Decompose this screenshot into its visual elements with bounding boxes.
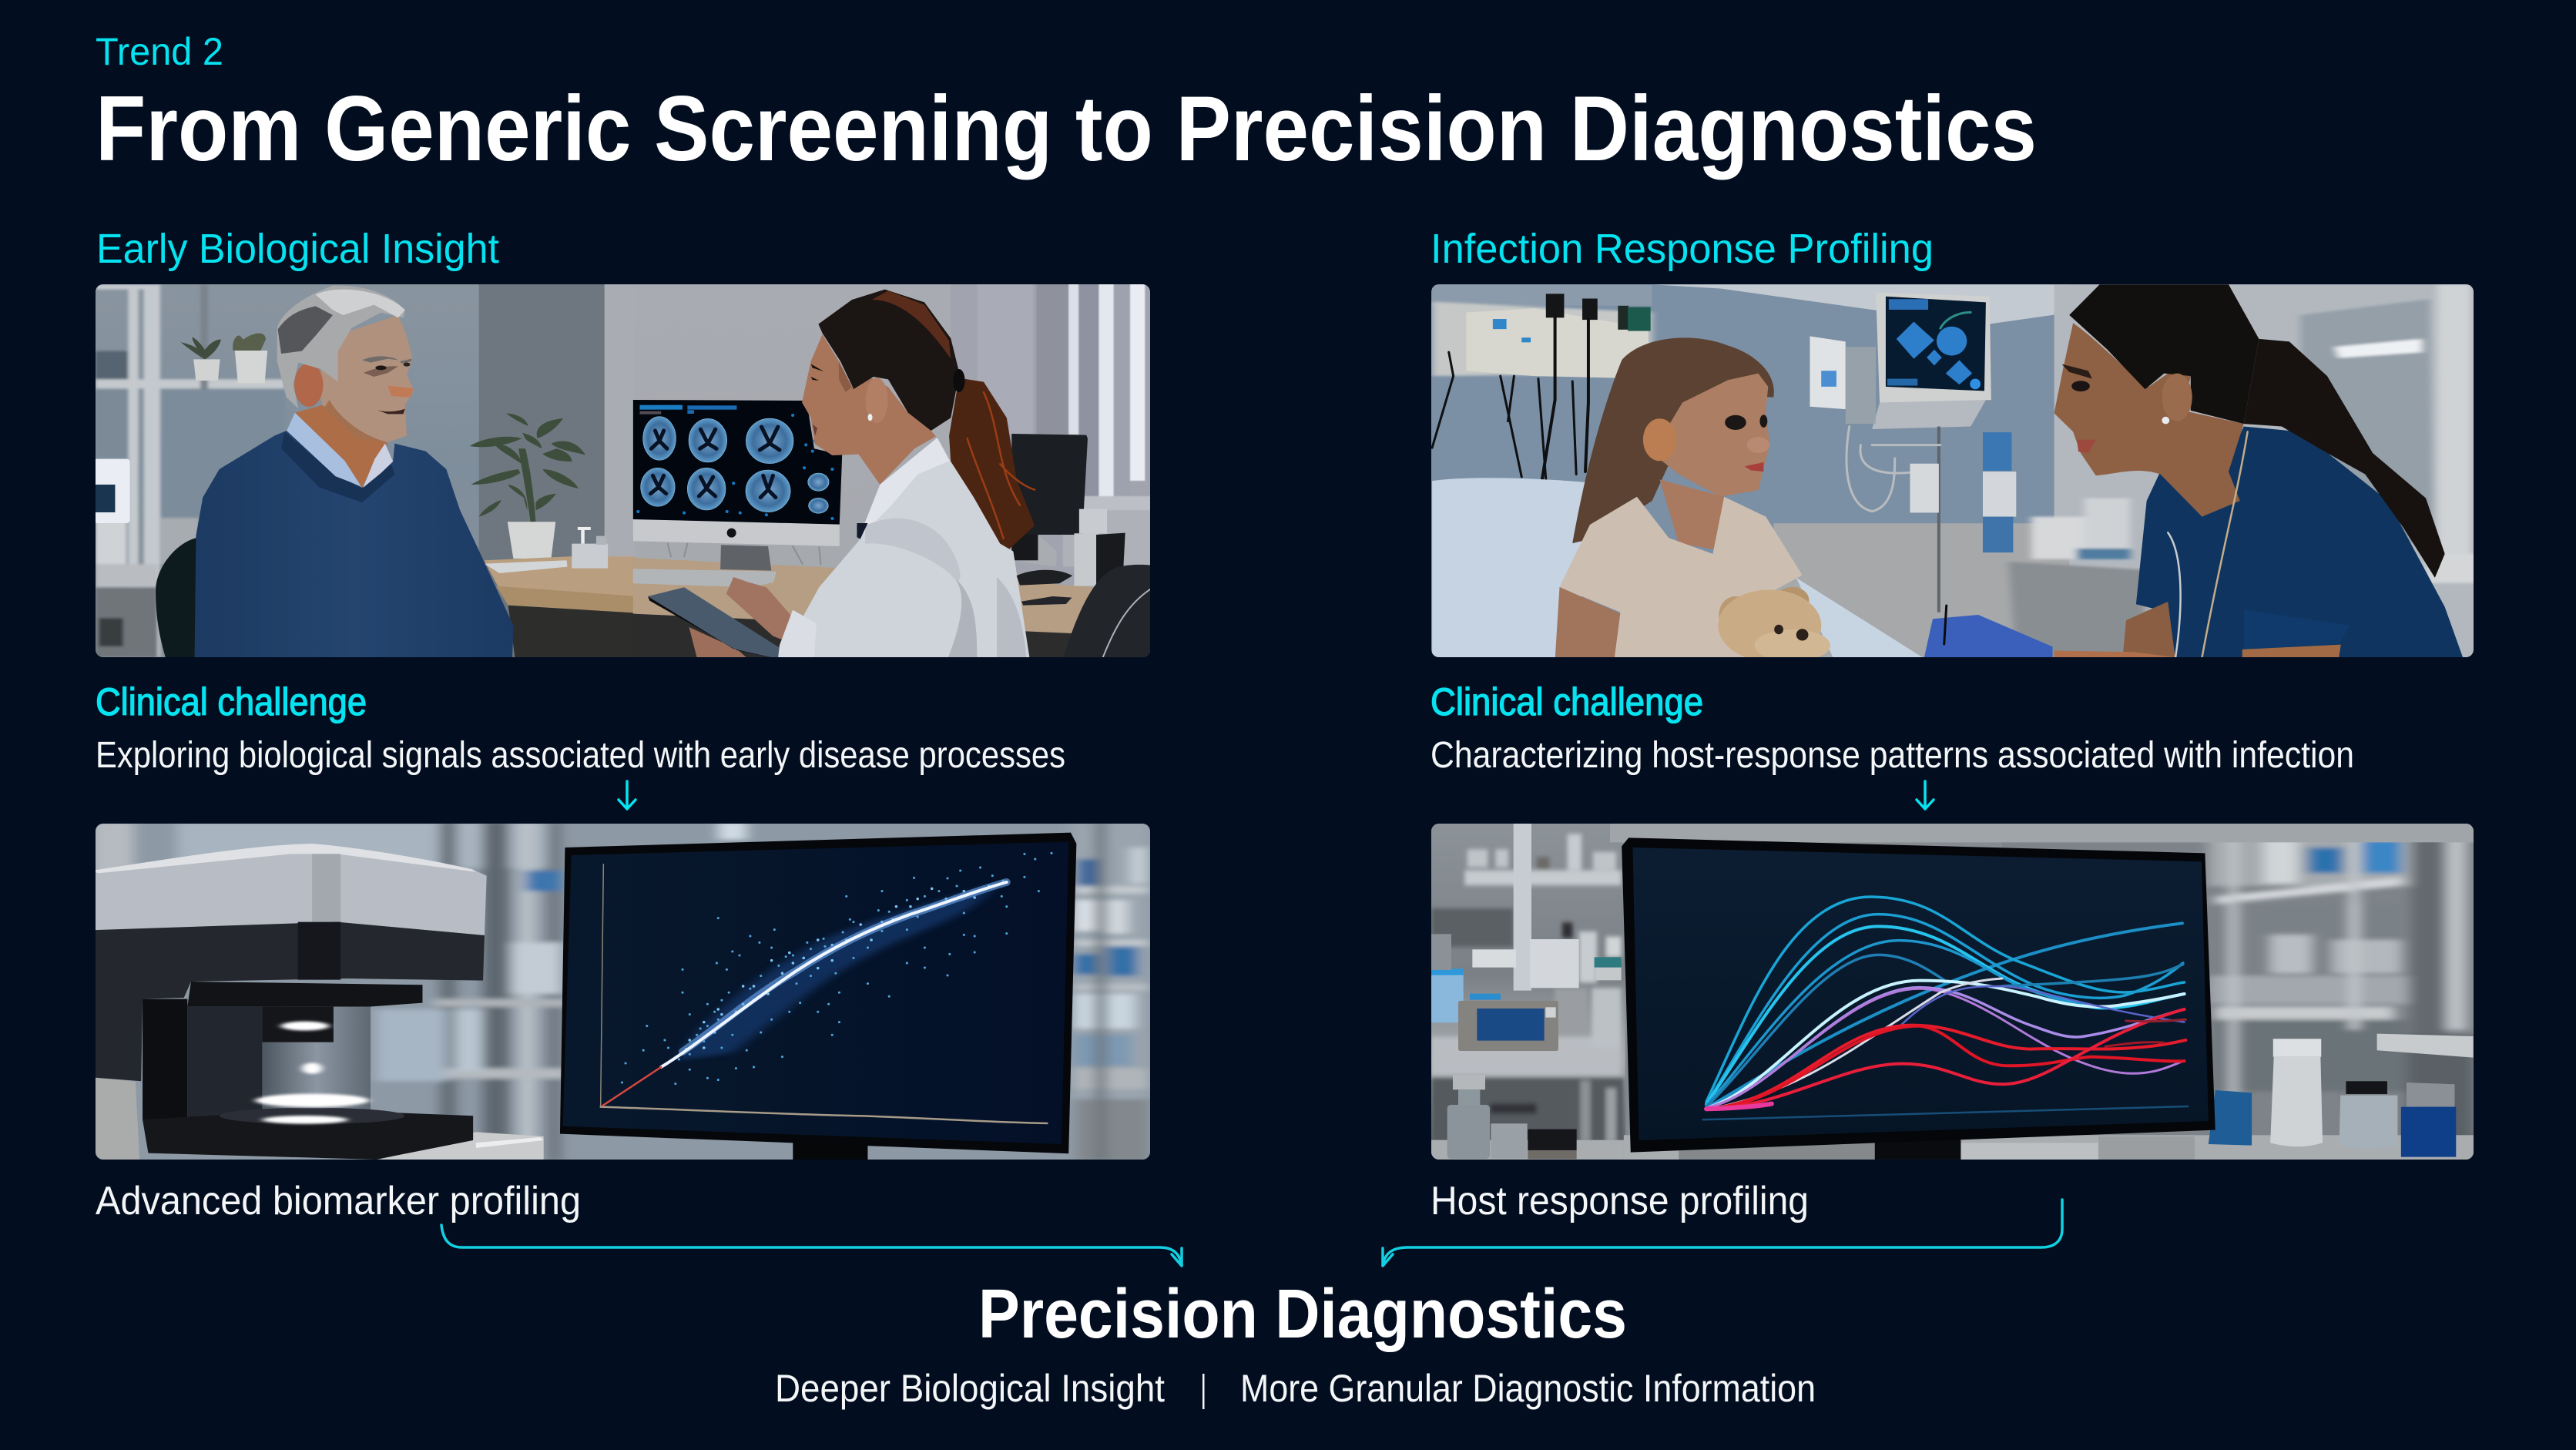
wall posters <box>1983 432 2016 552</box>
desk gadget <box>572 527 608 569</box>
conclusion heading: Precision Diagnostics <box>978 1276 1627 1353</box>
girl <box>1555 337 1803 660</box>
heading: left column: Early Biological Insight <box>96 226 499 272</box>
plant pot <box>508 522 555 559</box>
conclusion benefit: deeper biological insight: Deeper Biological Insight <box>775 1367 1165 1410</box>
white device <box>94 459 130 523</box>
photo: doctor consulting older man <box>94 283 1153 660</box>
man <box>195 286 513 660</box>
vital signs monitor <box>1876 293 1991 403</box>
instrument <box>91 844 487 1162</box>
background analyser <box>1458 1001 1558 1051</box>
scatter plot axes <box>601 864 1047 1123</box>
scan side dots <box>638 415 832 519</box>
scatter points <box>622 853 1052 1084</box>
monitor <box>560 833 1076 1163</box>
table <box>1624 1135 2484 1163</box>
teddy bear <box>1718 587 1830 661</box>
scatter trend <box>602 882 1007 1106</box>
scan ventricles <box>651 427 780 498</box>
photo: host response monitor with curves <box>1430 822 2484 1163</box>
iMac <box>633 400 842 546</box>
right half: monitor and woman <box>633 283 1153 660</box>
right shelf block <box>2377 1034 2474 1058</box>
instrument base <box>143 1108 473 1160</box>
window blinds <box>1037 284 1150 567</box>
arrow: right down <box>1917 781 1934 809</box>
head and hair <box>802 290 965 485</box>
sample glow <box>255 1022 369 1124</box>
scatter glow <box>676 884 996 1061</box>
label: clinical challenge right: Clinical challenge <box>1431 680 1703 723</box>
arrow: bracket left to precision diagnostics <box>441 1225 1182 1266</box>
label: clinical challenge left: Clinical challenge <box>96 680 367 723</box>
arrow: left down <box>619 781 636 809</box>
conclusion benefit: more granular diagnostic information: More Granular Diagnostic Information <box>1240 1367 1816 1410</box>
blurred lab base <box>1431 824 2474 1160</box>
title: From Generic Screening to Precision Diagnostics <box>96 77 2037 180</box>
blurred lab left side <box>1430 822 1625 1161</box>
desk plant <box>470 413 585 522</box>
chair <box>156 538 196 657</box>
right desk items <box>1017 509 1125 606</box>
monitor header data <box>639 405 736 415</box>
poster <box>1810 336 1846 409</box>
nurse <box>2054 284 2464 660</box>
photo: biomarker instrument and scatter plot monitor <box>91 822 1156 1163</box>
monitor arm and tubing <box>1846 347 1986 613</box>
ponytail <box>949 378 1035 552</box>
right bottles <box>2209 1039 2456 1157</box>
foreground bottles <box>1431 1075 1624 1160</box>
arrow: bracket right to precision diagnostics <box>1383 1200 2062 1266</box>
caption: advanced biomarker profiling: Advanced biomarker profiling <box>96 1179 581 1223</box>
text: left challenge description: Exploring biological signals associated with early disease processes <box>96 735 1065 776</box>
hand and tablet <box>648 577 817 660</box>
dark monitor <box>1011 434 1088 535</box>
brain scans <box>641 417 829 513</box>
desk <box>484 556 637 660</box>
photo: doctor with child patient <box>1424 284 2479 661</box>
glove <box>1924 606 2053 660</box>
wall devices <box>1466 294 1651 379</box>
lab coat <box>803 438 1029 657</box>
iMac stand and keyboard <box>633 544 820 587</box>
cables <box>1432 317 1588 479</box>
desk chair <box>1062 565 1153 660</box>
text: right challenge description: Characterizing host-response patterns associated with infection <box>1431 735 2354 776</box>
heading: right column: Infection Response Profiling <box>1431 226 1934 272</box>
response curves <box>1703 897 2188 1119</box>
top strip above monitor <box>1610 822 2484 842</box>
conclusion divider <box>1202 1374 1205 1409</box>
shelf plants <box>181 334 267 383</box>
monitor stand behind <box>1011 535 1057 567</box>
desk <box>633 558 1095 660</box>
eyebrow: Trend 2: Trend 2 <box>96 30 223 73</box>
caption: host response profiling: Host response profiling <box>1431 1179 1809 1223</box>
table <box>376 1132 544 1161</box>
left half: office and man <box>94 283 637 660</box>
bed <box>1432 478 1927 660</box>
monitor <box>1622 837 2215 1160</box>
